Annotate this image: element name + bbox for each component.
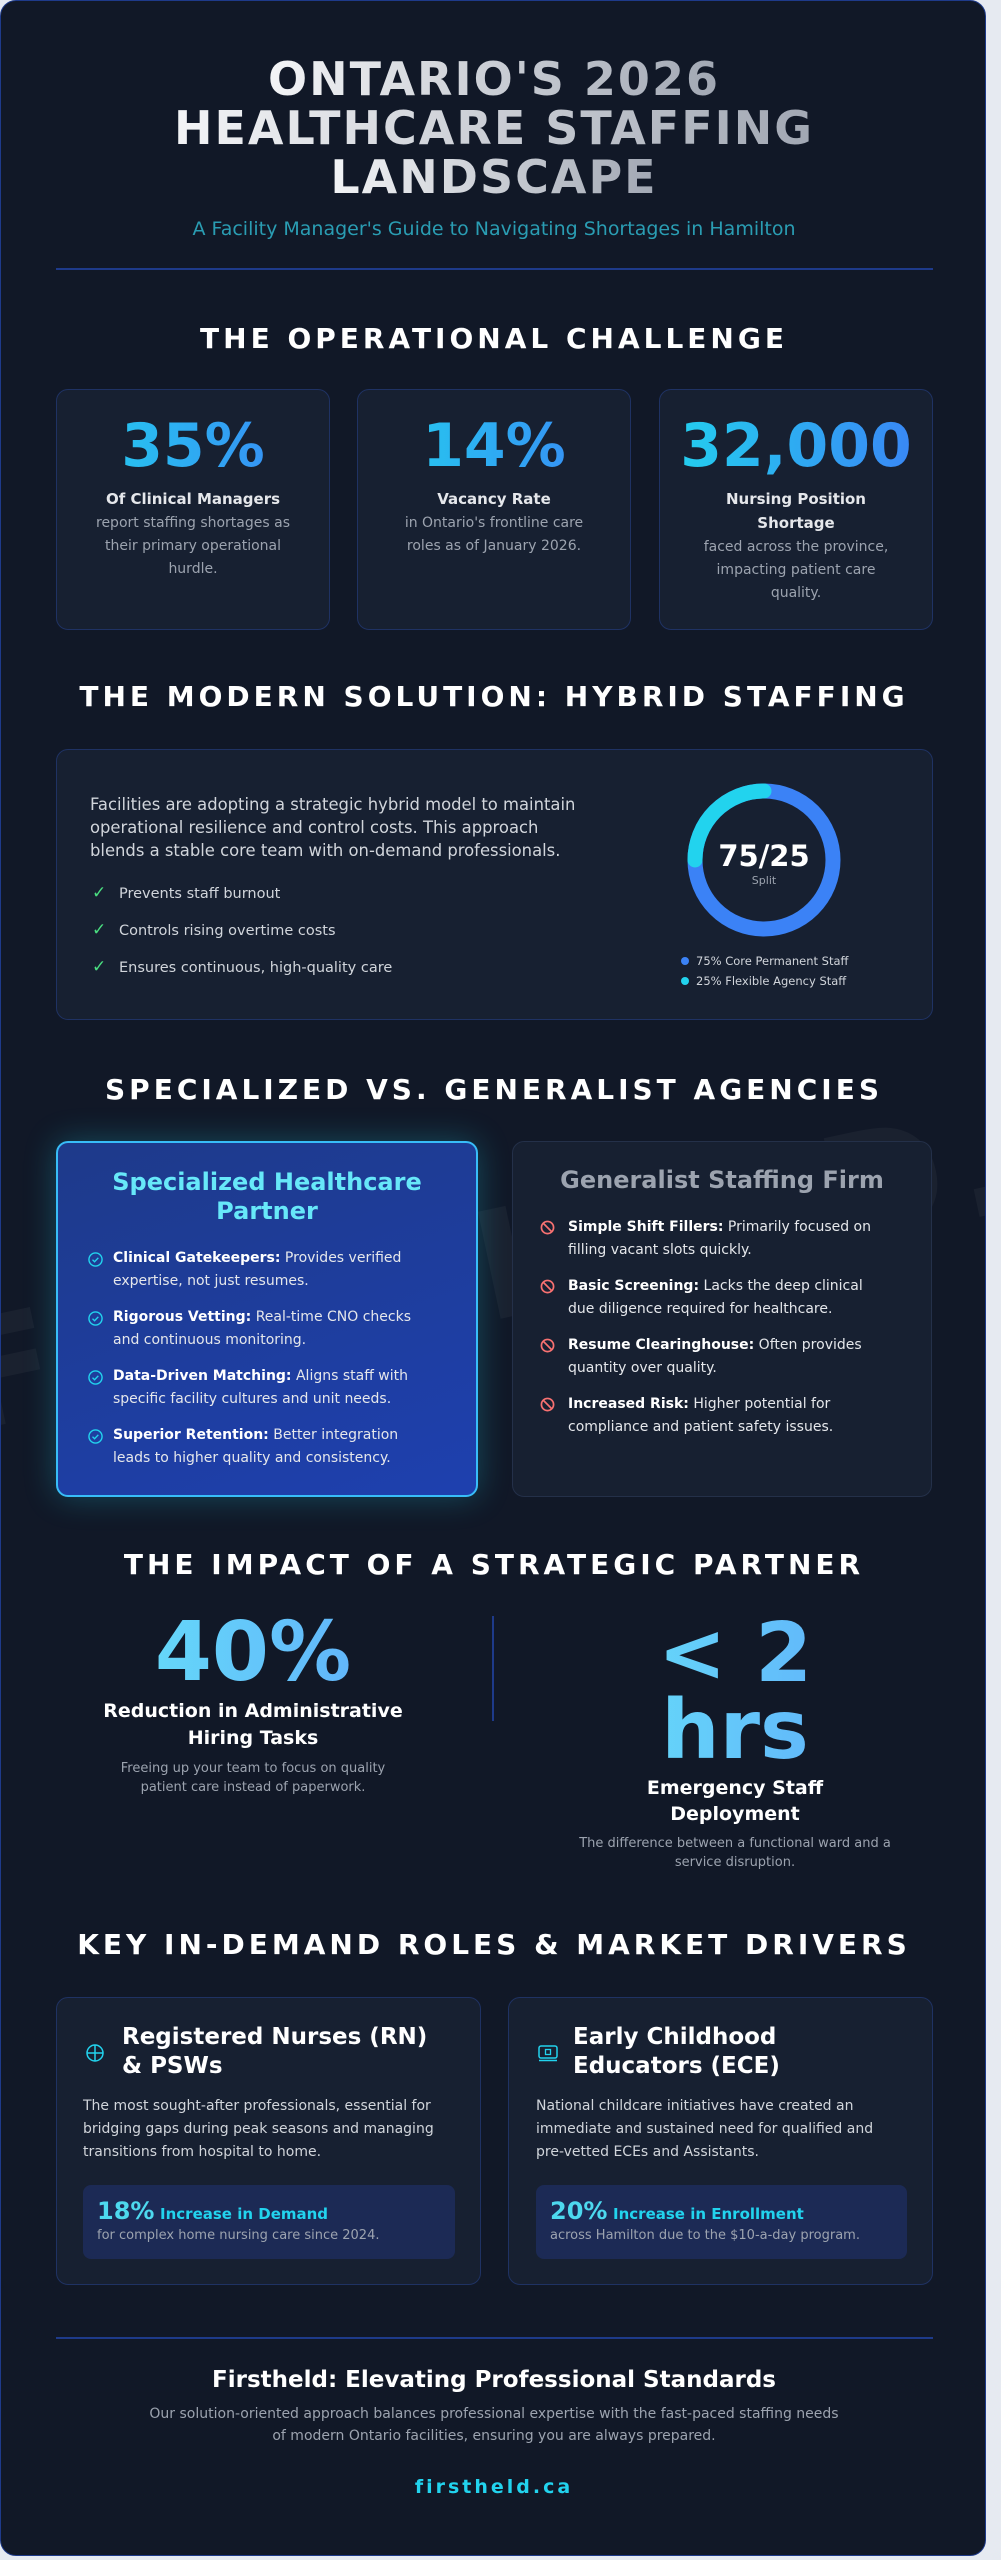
footer: [149, 2367, 839, 2498]
impact stat: 40%: Freeing up your team to focus on quality: [121, 1761, 385, 1776]
legend: 75% Core Permanent Staff: [696, 954, 848, 968]
panel: generalist firm: Increased Risk: Higher potential for: [568, 1396, 830, 1412]
panel: hybrid staffing: [56, 749, 933, 1020]
stat card: 35%: hurdle.: [168, 561, 218, 577]
card: RN & PSWs: transitions from hospital to home.: [83, 2144, 321, 2160]
text block: hybrid description: [90, 795, 575, 860]
title: [174, 52, 814, 204]
impact stat: 40%: patient care instead of paperwork.: [141, 1780, 365, 1795]
stat card: 14%: Vacancy Rate: [437, 490, 551, 508]
card: RN & PSWs: Registered Nurses (RN): [122, 2024, 427, 2050]
checklist: ✓: [92, 920, 106, 940]
impact stat: < 2 hrs: Emergency Staff: [647, 1777, 823, 1799]
stat card: 32,000: Nursing Position: [726, 490, 866, 508]
impact stat: < 2 hrs: service disruption.: [675, 1855, 795, 1870]
donut chart: 75/25: [718, 839, 810, 873]
impact stat: < 2 hrs: The difference between a functional ward and a: [579, 1836, 891, 1851]
card: RN & PSWs: bridging gaps during peak seasons and managing: [83, 2121, 434, 2137]
title: HEALTHCARE STAFFING: [174, 101, 814, 155]
legend: 25% Flexible Agency Staff: [696, 974, 846, 988]
impact stat: 40%: Hiring Tasks: [188, 1727, 318, 1749]
stat box: 18% Increase in Demand: [97, 2197, 328, 2225]
checklist: Ensures continuous, high-quality care: [119, 960, 392, 976]
stat card: 35%: [56, 389, 330, 630]
panel: generalist firm: Resume Clearinghouse: Often provides: [568, 1337, 862, 1353]
stat card: 14%: [357, 389, 631, 630]
icon: educator: [538, 2045, 558, 2062]
card: ECE: [508, 1997, 933, 2285]
panel: generalist firm: [512, 1141, 932, 1497]
card: ECE: Early Childhood: [573, 2024, 776, 2050]
title: LANDSCAPE: [330, 150, 658, 204]
checklist: [92, 883, 392, 977]
card: RN & PSWs: & PSWs: [122, 2053, 223, 2079]
stat card: 35%: Of Clinical Managers: [106, 490, 280, 508]
title: ONTARIO'S 2026: [268, 52, 720, 106]
subtitle: A Facility Manager's Guide to Navigating Shortages in Hamilton: [192, 218, 796, 240]
title: Specialized Healthcare: [112, 1168, 422, 1196]
footer: firstheld.ca: [415, 2476, 573, 2498]
stat box: [83, 2185, 455, 2259]
card: RN & PSWs: [56, 1997, 481, 2285]
stat card: 32,000: faced across the province,: [704, 539, 888, 555]
impact stat: 40%: 40%: [155, 1605, 351, 1700]
legend: [681, 954, 849, 988]
heading: specialized vs generalist: SPECIALIZED VS. GENERALIST AGENCIES: [105, 1073, 883, 1106]
panel: specialized partner: leads to higher quality and consistency.: [113, 1450, 391, 1466]
card: ECE: National childcare initiatives have created an: [536, 2098, 853, 2114]
card: ECE: pre-vetted ECEs and Assistants.: [536, 2144, 759, 2160]
stat card: 14%: roles as of January 2026.: [407, 538, 581, 554]
list: [88, 1250, 411, 1466]
stat card: 32,000: quality.: [771, 585, 821, 601]
impact stat: 40%: Reduction in Administrative: [103, 1700, 403, 1722]
checklist: Controls rising overtime costs: [119, 923, 336, 939]
checklist: ✓: [92, 957, 106, 977]
donut chart: [688, 784, 840, 936]
text block: hybrid description: blends a stable core team with on-demand professionals.: [90, 841, 560, 860]
footer: Our solution-oriented approach balances professional expertise with the fast-paced staffing needs: [149, 2406, 839, 2422]
title: Generalist Staffing Firm: [560, 1166, 884, 1194]
panel: specialized partner: and continuous monitoring.: [113, 1332, 306, 1348]
title: [112, 1168, 422, 1225]
stat card: 32,000: impacting patient care: [717, 562, 875, 578]
panel: generalist firm: Basic Screening: Lacks the deep clinical: [568, 1278, 863, 1294]
panel: specialized partner: Data-Driven Matching: Aligns staff with: [113, 1368, 408, 1384]
checklist: Prevents staff burnout: [119, 886, 280, 902]
panel: specialized partner: Clinical Gatekeepers: Provides verified: [113, 1250, 401, 1266]
title: Partner: [216, 1197, 318, 1225]
impact stat: < 2 hrs: hrs: [661, 1683, 809, 1778]
text block: hybrid description: operational resilience and control costs. This approach: [90, 818, 538, 837]
heading: modern solution: THE MODERN SOLUTION: HYBRID STAFFING: [79, 680, 909, 713]
stat box: for complex home nursing care since 2024.: [97, 2228, 379, 2243]
impact stat: < 2 hrs: Deployment: [670, 1803, 800, 1825]
stat card: 32,000: 32,000: [680, 411, 912, 481]
stat card: 32,000: [659, 389, 933, 630]
panel: generalist firm: filling vacant slots quickly.: [568, 1242, 752, 1258]
panel: specialized partner: expertise, not just resumes.: [113, 1273, 309, 1289]
stat card: 32,000: Shortage: [757, 514, 835, 532]
stat box: [536, 2185, 907, 2259]
text block: hybrid description: Facilities are adopting a strategic hybrid model to maintain: [90, 795, 575, 814]
panel: specialized partner: specific facility cultures and unit needs.: [113, 1391, 391, 1407]
stat box: 20% Increase in Enrollment: [550, 2197, 804, 2225]
panel: generalist firm: quantity over quality.: [568, 1360, 717, 1376]
list: [540, 1219, 871, 1435]
donut chart: Split: [752, 874, 777, 887]
panel: generalist firm: due diligence required for healthcare.: [568, 1301, 832, 1317]
panel: generalist firm: compliance and patient safety issues.: [568, 1419, 833, 1435]
card: ECE: Educators (ECE): [573, 2053, 780, 2079]
heading: operational challenge: THE OPERATIONAL CHALLENGE: [200, 322, 788, 355]
impact stat: < 2 hrs: < 2: [658, 1606, 812, 1701]
icon: medical cross: [86, 2044, 104, 2062]
card: RN & PSWs: The most sought-after professionals, essential for: [83, 2098, 431, 2114]
stat box: across Hamilton due to the $10-a-day program.: [550, 2228, 860, 2243]
panel: specialized partner: Superior Retention: Better integration: [113, 1427, 398, 1443]
panel: specialized partner: Rigorous Vetting: Real-time CNO checks: [113, 1309, 411, 1325]
impact stat: 40%: [103, 1605, 403, 1795]
card: ECE: immediate and sustained need for qualified and: [536, 2121, 873, 2137]
checklist: ✓: [92, 883, 106, 903]
impact stat: < 2 hrs: [579, 1606, 891, 1870]
footer: Firstheld: Elevating Professional Standards: [212, 2367, 776, 2393]
stat card: 35%: report staffing shortages as: [96, 515, 290, 531]
stat card: 35%: their primary operational: [105, 538, 281, 554]
heading: impact: THE IMPACT OF A STRATEGIC PARTNER: [124, 1548, 864, 1581]
stat card: 35%: 35%: [121, 411, 265, 481]
panel: generalist firm: Simple Shift Fillers: Primarily focused on: [568, 1219, 871, 1235]
footer: of modern Ontario facilities, ensuring you are always prepared.: [272, 2428, 716, 2444]
stat card: 14%: 14%: [422, 411, 566, 481]
heading: key roles: KEY IN-DEMAND ROLES & MARKET DRIVERS: [77, 1928, 911, 1961]
stat card: 14%: in Ontario's frontline care: [405, 515, 583, 531]
panel: specialized partner: [56, 1141, 478, 1497]
